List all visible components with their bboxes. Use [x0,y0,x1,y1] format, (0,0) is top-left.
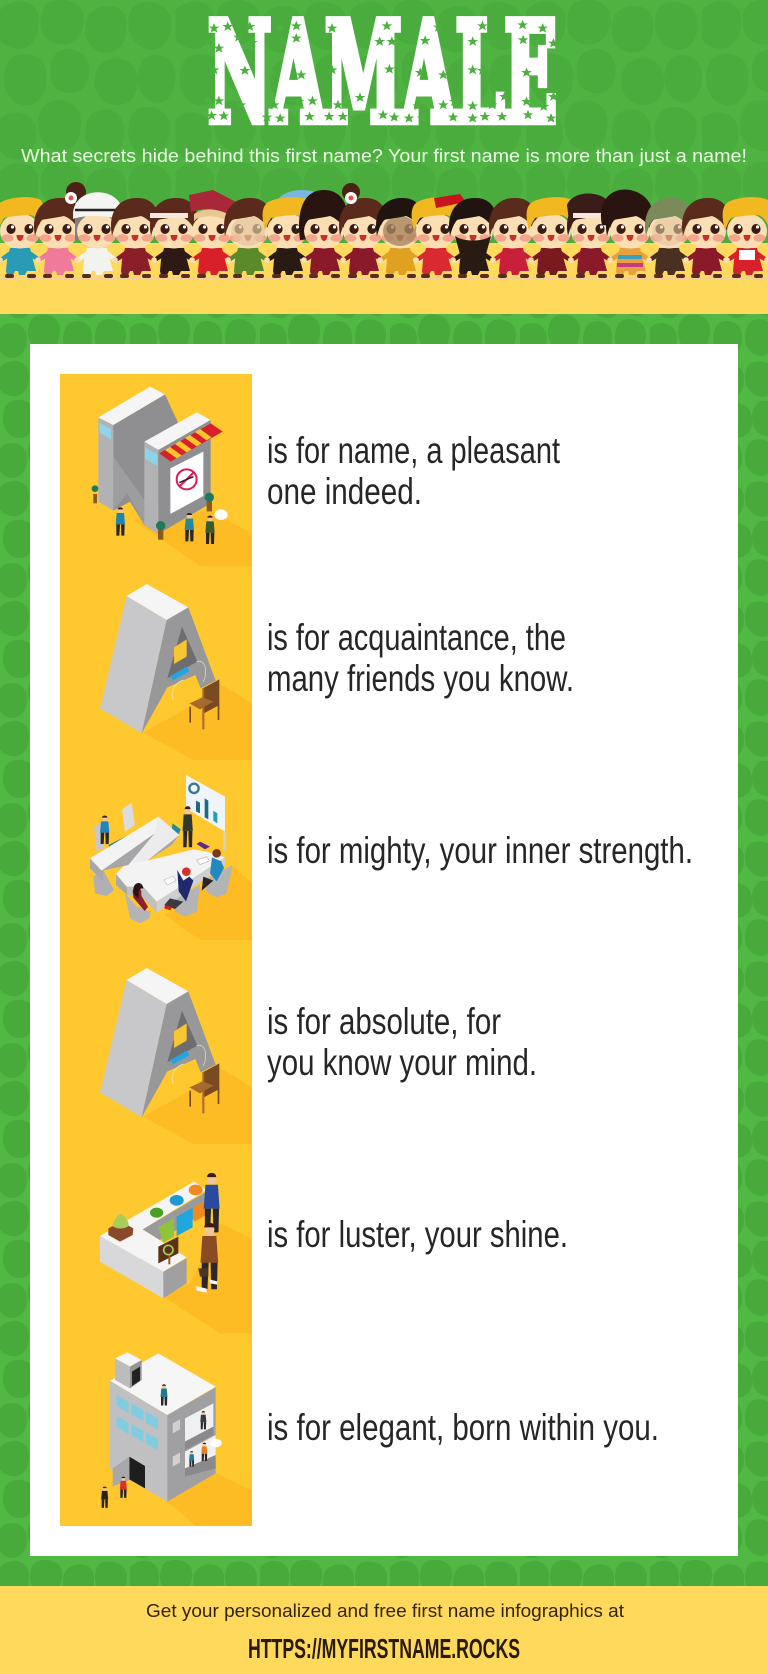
text: second A line: is for absolute, for [267,1001,501,1042]
row E [101,1352,659,1526]
footer [0,1586,768,1674]
table sides [90,858,103,882]
stars inside title letters [203,20,559,123]
text: A line: is for acquaintance, the [267,617,566,658]
character 10 [339,183,387,278]
text: E line: is for elegant, born within you. [267,1407,659,1448]
character 12 [412,194,466,278]
character 11 [376,198,424,278]
icon: isometric letter L recycling counter [100,1173,252,1333]
icon: isometric letter N storefront [92,387,252,566]
character 5 [150,198,198,278]
title: NAMALE [203,0,559,154]
character 17 [601,189,654,278]
seated people [133,849,224,911]
subtitle: What secrets hide behind this first name? Your first name is more than just a name! [21,145,747,166]
row L [100,1173,568,1333]
character 6 [189,190,236,278]
row M [90,775,693,940]
character 4 [111,198,159,278]
icon: isometric letter A desk [100,584,252,760]
character 7 [224,198,272,278]
header [21,0,747,166]
character 13 [449,198,497,278]
character 19 [682,198,730,278]
yellow illustration column [60,374,252,1526]
icon: isometric office building [101,1352,252,1526]
icon: isometric letter M meeting table [90,775,252,940]
footer url: HTTPS://MYFIRSTNAME.ROCKS [248,1633,520,1664]
character 3 [73,192,123,278]
row A (second) [100,968,537,1144]
text: N line: one indeed. [267,471,422,512]
character 14 [489,198,537,278]
text: second A line: you know your mind. [267,1042,537,1083]
icon: isometric letter A desk, repeated [100,968,252,1144]
text: N line: is for name, a pleasant [267,430,561,471]
table top [90,817,225,902]
main white panel [30,344,738,1556]
whiteboard [186,775,226,851]
row A [100,584,574,760]
character 18 [645,198,693,278]
chairs [93,870,114,896]
footer text: Get your personalized and free first name infographics at [146,1600,624,1621]
character 9 [299,190,348,278]
blue cap [276,190,328,220]
character 1 [0,197,44,278]
character 2 [34,182,86,278]
text: L line: is for luster, your shine. [267,1214,568,1255]
text: A line: many friends you know. [267,658,574,699]
row N [92,387,561,566]
character 8 [263,197,311,278]
character 16 [567,193,615,278]
character 15 [527,197,575,278]
character 20 [723,197,768,278]
banner: parade of cartoon characters [0,182,768,314]
